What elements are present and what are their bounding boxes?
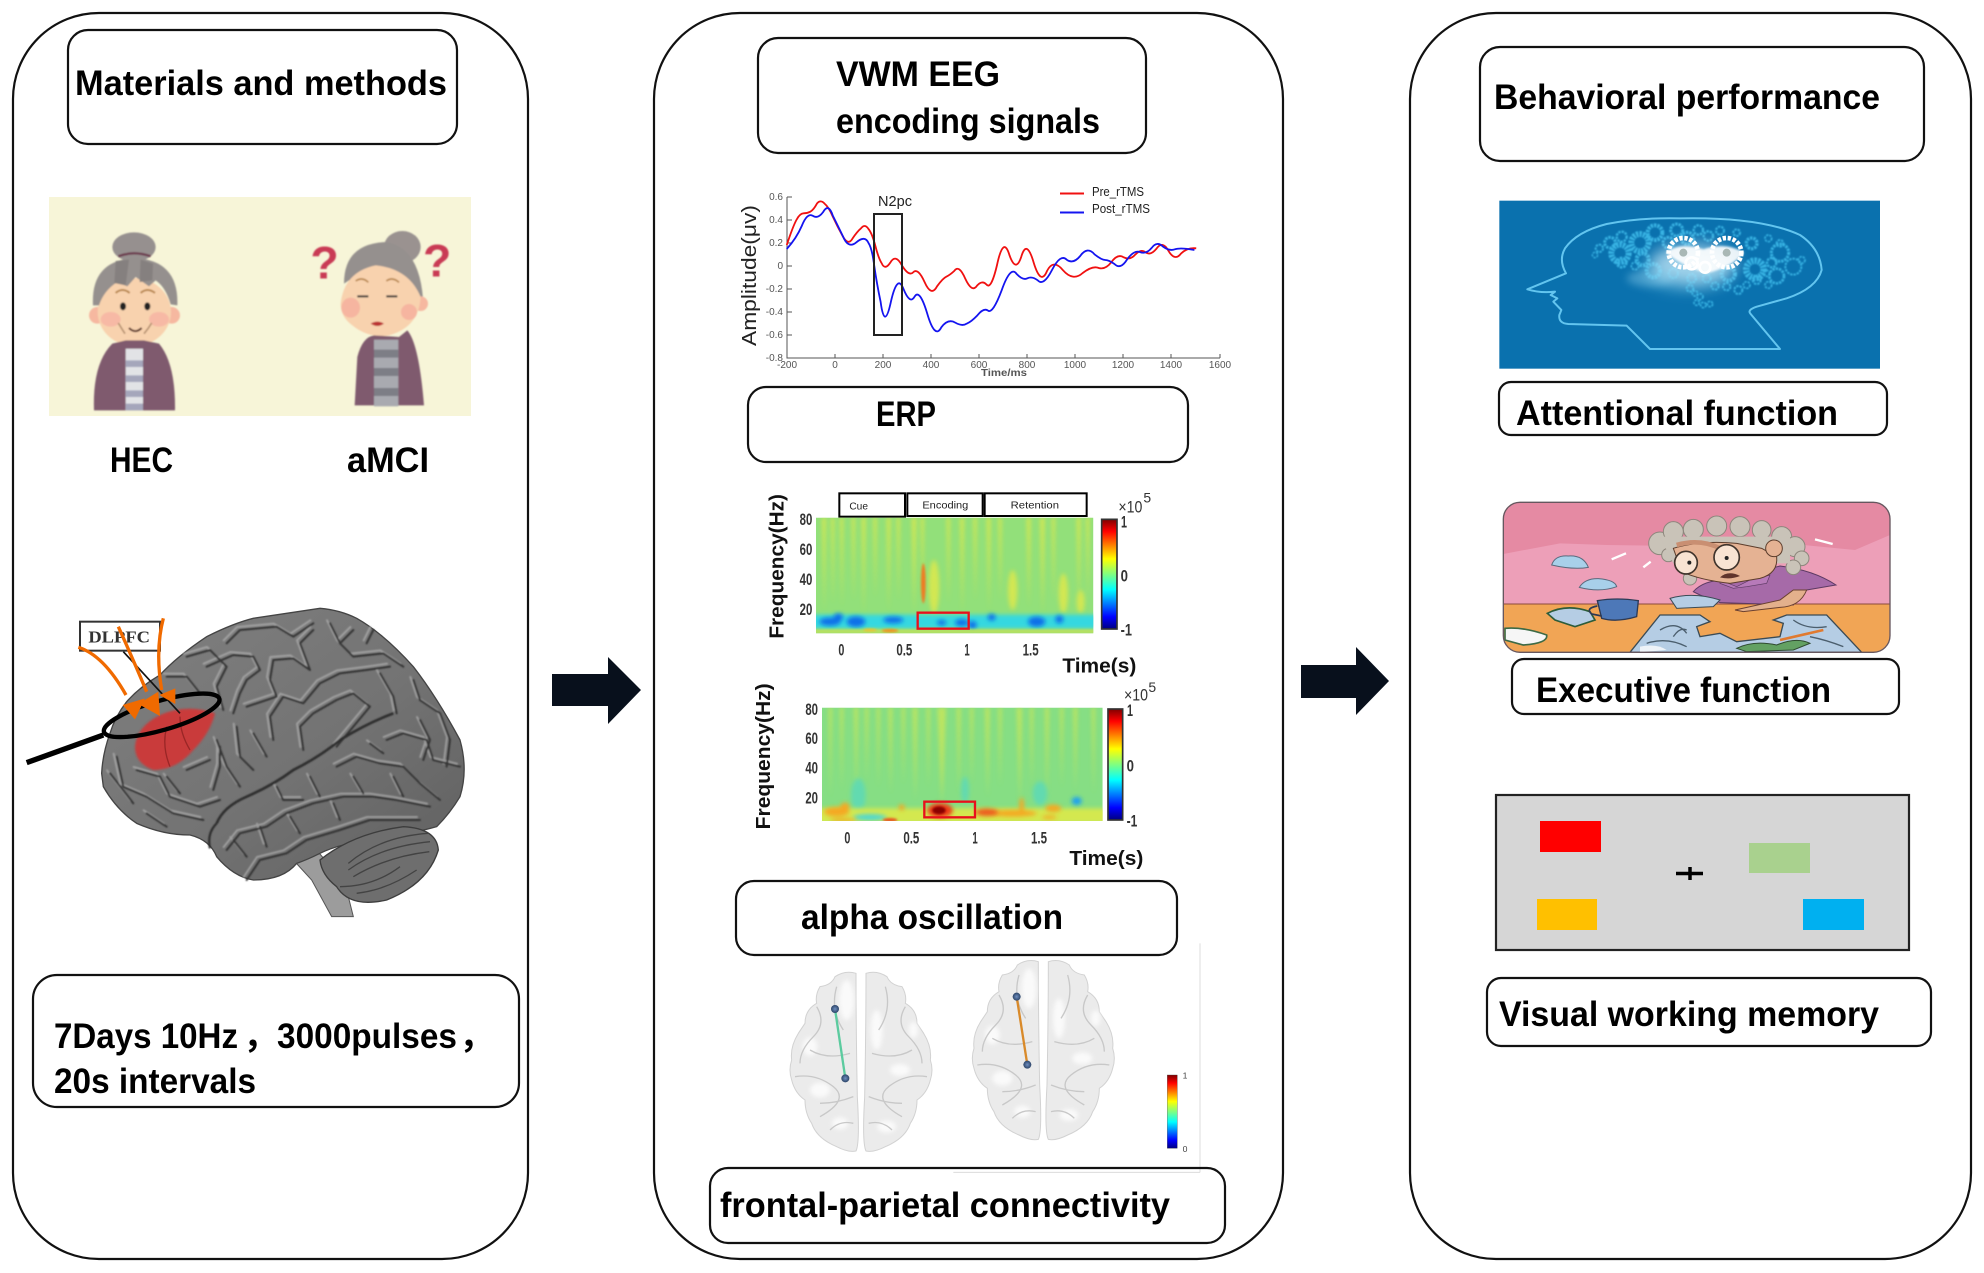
- DLPFC label: [80, 622, 160, 651]
- fixation cross: [1676, 867, 1703, 880]
- left panel frame: [13, 13, 528, 1259]
- label box: visual working memory: [1487, 978, 1931, 1046]
- chart: ERP waveform: [739, 184, 1232, 379]
- colour scale: 1: [1121, 512, 1127, 531]
- x tick labels: 400: [923, 360, 940, 371]
- cortical folds: [107, 620, 460, 880]
- colour scale: -1: [1127, 812, 1137, 831]
- y tick labels: -0.8: [766, 353, 783, 364]
- question marks: [310, 235, 451, 289]
- parameter box: stimulation protocol: ，: [243, 1017, 278, 1056]
- arrow: EEG signals to behavior: [1301, 647, 1389, 715]
- x axis labels: [838, 641, 1039, 660]
- y tick labels: 0.4: [769, 215, 783, 226]
- y axis labels: 40: [805, 758, 818, 777]
- figure: frontal-parietal connectivity brains: [790, 943, 1200, 1172]
- x axis title: Time/ms: [981, 368, 1027, 379]
- colour scale: 1: [1127, 701, 1133, 720]
- colour scale: 0: [1183, 1144, 1188, 1154]
- y axis labels: 80: [800, 510, 812, 529]
- colour scale: 5: [1143, 490, 1151, 506]
- x tick labels: -200: [777, 360, 797, 371]
- region of interest: [918, 613, 969, 629]
- rTMS coil: [27, 685, 223, 763]
- illustration: lateral brain with rTMS coil over DLPFC: [27, 608, 464, 917]
- heading: behavioral performance: Behavioral performance: [1494, 78, 1880, 117]
- y axis labels: 60: [800, 540, 812, 559]
- right panel frame: [1410, 13, 1971, 1259]
- red waveform: Pre_rTMS: [787, 201, 1196, 291]
- label box: visual working memory: Visual working memory: [1499, 995, 1880, 1034]
- y axis labels: 60: [805, 729, 818, 748]
- spectrogram: post rTMS: [753, 679, 1156, 870]
- legend: Post_rTMS: [1092, 201, 1150, 216]
- y tick labels: 0.6: [769, 192, 783, 203]
- blue square: [1803, 899, 1864, 930]
- heading: behavioral performance: [1480, 47, 1924, 161]
- colour scale: -1: [1121, 620, 1132, 639]
- x tick labels: 1400: [1160, 360, 1183, 371]
- magnetic pulse arrows: [78, 618, 175, 719]
- panel: VWM EEG encoding signals: [654, 13, 1283, 1259]
- y axis title: Amplitude(μv): [739, 205, 761, 346]
- x tick labels: 1600: [1209, 360, 1232, 371]
- colour scale: [1102, 490, 1151, 639]
- colour scale: [1108, 679, 1156, 831]
- y axis labels: 40: [800, 570, 812, 589]
- heading: materials and methods: [68, 30, 457, 144]
- cortex: [102, 608, 464, 880]
- colour scale: 5: [1148, 679, 1156, 695]
- x tick labels: [777, 360, 1232, 371]
- loose pieces: [1547, 608, 1595, 627]
- glow and white gears: [1627, 238, 1744, 287]
- x tick labels: 1000: [1064, 360, 1087, 371]
- x tick labels: 0: [832, 360, 838, 371]
- N2pc window: N2pc: [878, 193, 912, 210]
- y tick labels: -0.2: [766, 284, 783, 295]
- colour scale: 0: [1121, 566, 1128, 585]
- brain: pre rTMS connection: [790, 972, 932, 1151]
- clouds: [1552, 556, 1588, 568]
- DLPFC label: DLPFC: [88, 628, 150, 647]
- phase header: cue, encoding, retention: [839, 493, 1087, 517]
- parameter box: stimulation protocol: [33, 975, 519, 1107]
- label box: attentional function: [1499, 382, 1887, 435]
- legend: [1060, 184, 1150, 216]
- cerebellum: [320, 827, 438, 902]
- parameter box: stimulation protocol: 3000pulses: [277, 1017, 457, 1056]
- label: HEC: HEC: [110, 441, 173, 480]
- x tick labels: 200: [875, 360, 892, 371]
- heading: materials and methods: Materials and methods: [75, 64, 447, 103]
- axis titles: Frequency(Hz): [753, 683, 775, 829]
- coffee mug: [1597, 599, 1638, 620]
- label box: executive function: Executive function: [1536, 671, 1831, 710]
- label box: frontal-parietal connectivity: frontal-parietal connectivity: [720, 1186, 1171, 1225]
- label: aMCI: aMCI: [347, 441, 429, 480]
- brain: post rTMS connection: [972, 961, 1114, 1140]
- x axis labels: 1: [972, 828, 978, 847]
- phase header: cue, encoding, retention: Cue: [849, 501, 868, 512]
- middle panel frame: [654, 13, 1283, 1259]
- x axis labels: 0.5: [903, 828, 919, 847]
- N2pc window: [874, 193, 912, 335]
- x axis labels: [844, 828, 1047, 847]
- panel: behavioral performance: [1410, 13, 1971, 1259]
- illustration: head with gears: [1499, 201, 1880, 369]
- blue waveform: Post_rTMS: [787, 208, 1194, 331]
- woman body: [1693, 566, 1836, 605]
- label box: executive function: [1512, 659, 1899, 714]
- heading: VWM EEG encoding signals: [758, 38, 1146, 153]
- phase header: cue, encoding, retention: Retention: [1011, 501, 1059, 512]
- x tick labels: 1200: [1112, 360, 1135, 371]
- colour scale: ×10: [1124, 686, 1148, 705]
- parameter box: stimulation protocol: ，: [459, 1017, 494, 1056]
- question marks: ?: [423, 235, 451, 286]
- y axis labels: [800, 510, 812, 619]
- label box: alpha oscillation: [736, 881, 1177, 955]
- colour scale: 0: [1127, 756, 1134, 775]
- jigsaw board: [1630, 615, 1862, 652]
- phase header: cue, encoding, retention: Encoding: [922, 501, 968, 512]
- heading: VWM EEG encoding signals: VWM EEG: [836, 55, 1000, 94]
- label box: frontal-parietal connectivity: [710, 1168, 1225, 1243]
- label box: alpha oscillation: alpha oscillation: [801, 898, 1063, 937]
- x axis labels: 0: [844, 828, 850, 847]
- region of interest: [924, 802, 975, 817]
- parameter box: stimulation protocol: 7Days 10Hz: [54, 1017, 238, 1056]
- illustration: elderly woman doing a jigsaw puzzle: [1503, 502, 1890, 653]
- parameter box: stimulation protocol: 20s intervals: [54, 1062, 256, 1101]
- y tick labels: [766, 192, 783, 364]
- y tick labels: -0.6: [766, 330, 783, 341]
- question marks: ?: [310, 238, 339, 289]
- y axis labels: 20: [800, 600, 812, 619]
- y tick labels: 0.2: [769, 238, 783, 249]
- icon: aMCI elderly woman with question marks: [341, 231, 428, 406]
- y axis labels: 20: [805, 788, 818, 807]
- x axis labels: 1: [964, 641, 970, 660]
- heatmap: [810, 518, 1100, 633]
- axes: [787, 197, 1220, 358]
- heading: VWM EEG encoding signals: encoding signals: [836, 102, 1100, 141]
- y tick labels: 0: [777, 261, 783, 272]
- colour scale: ×10: [1118, 498, 1142, 517]
- colour scale: 1: [1183, 1071, 1188, 1081]
- heatmap: [817, 708, 1110, 823]
- spectrogram: post rTMS: Time(s): [1069, 848, 1143, 870]
- legend: Pre_rTMS: [1092, 184, 1144, 199]
- arrow: methods to EEG signals: [552, 657, 641, 724]
- icon: healthy elderly woman: [89, 232, 180, 410]
- x axis labels: 1.5: [1023, 641, 1039, 660]
- y tick labels: -0.4: [766, 307, 783, 318]
- panel: materials and methods: [13, 13, 528, 1259]
- target region: DLPFC: [135, 709, 215, 770]
- brain stem: [293, 850, 353, 917]
- label box: ERP: [748, 387, 1188, 462]
- x tick labels: 600: [971, 360, 988, 371]
- y axis labels: 80: [805, 700, 818, 719]
- gears: [1592, 224, 1805, 308]
- face: [1673, 542, 1777, 583]
- axis titles: Frequency(Hz): [766, 494, 788, 639]
- illustration: two elderly subjects: [49, 197, 471, 416]
- y axis labels: [805, 700, 818, 807]
- colour scale: [1167, 1071, 1188, 1154]
- x axis labels: 0.5: [896, 641, 912, 660]
- label box: attentional function: Attentional function: [1516, 394, 1838, 433]
- hair: [1649, 516, 1809, 585]
- spectrogram: pre rTMS: Time(s): [1062, 656, 1136, 678]
- x axis labels: 1.5: [1031, 828, 1047, 847]
- stimulus: colored squares around a fixation cross: [1496, 795, 1909, 950]
- red square: [1540, 821, 1601, 852]
- label box: ERP: ERP: [876, 395, 936, 434]
- yellow square: [1537, 899, 1597, 930]
- spectrogram: pre rTMS: [766, 490, 1151, 678]
- charts: time-frequency spectrograms: [753, 490, 1156, 870]
- x tick labels: 800: [1019, 360, 1036, 371]
- x axis labels: 0: [838, 641, 844, 660]
- green square: [1749, 843, 1810, 873]
